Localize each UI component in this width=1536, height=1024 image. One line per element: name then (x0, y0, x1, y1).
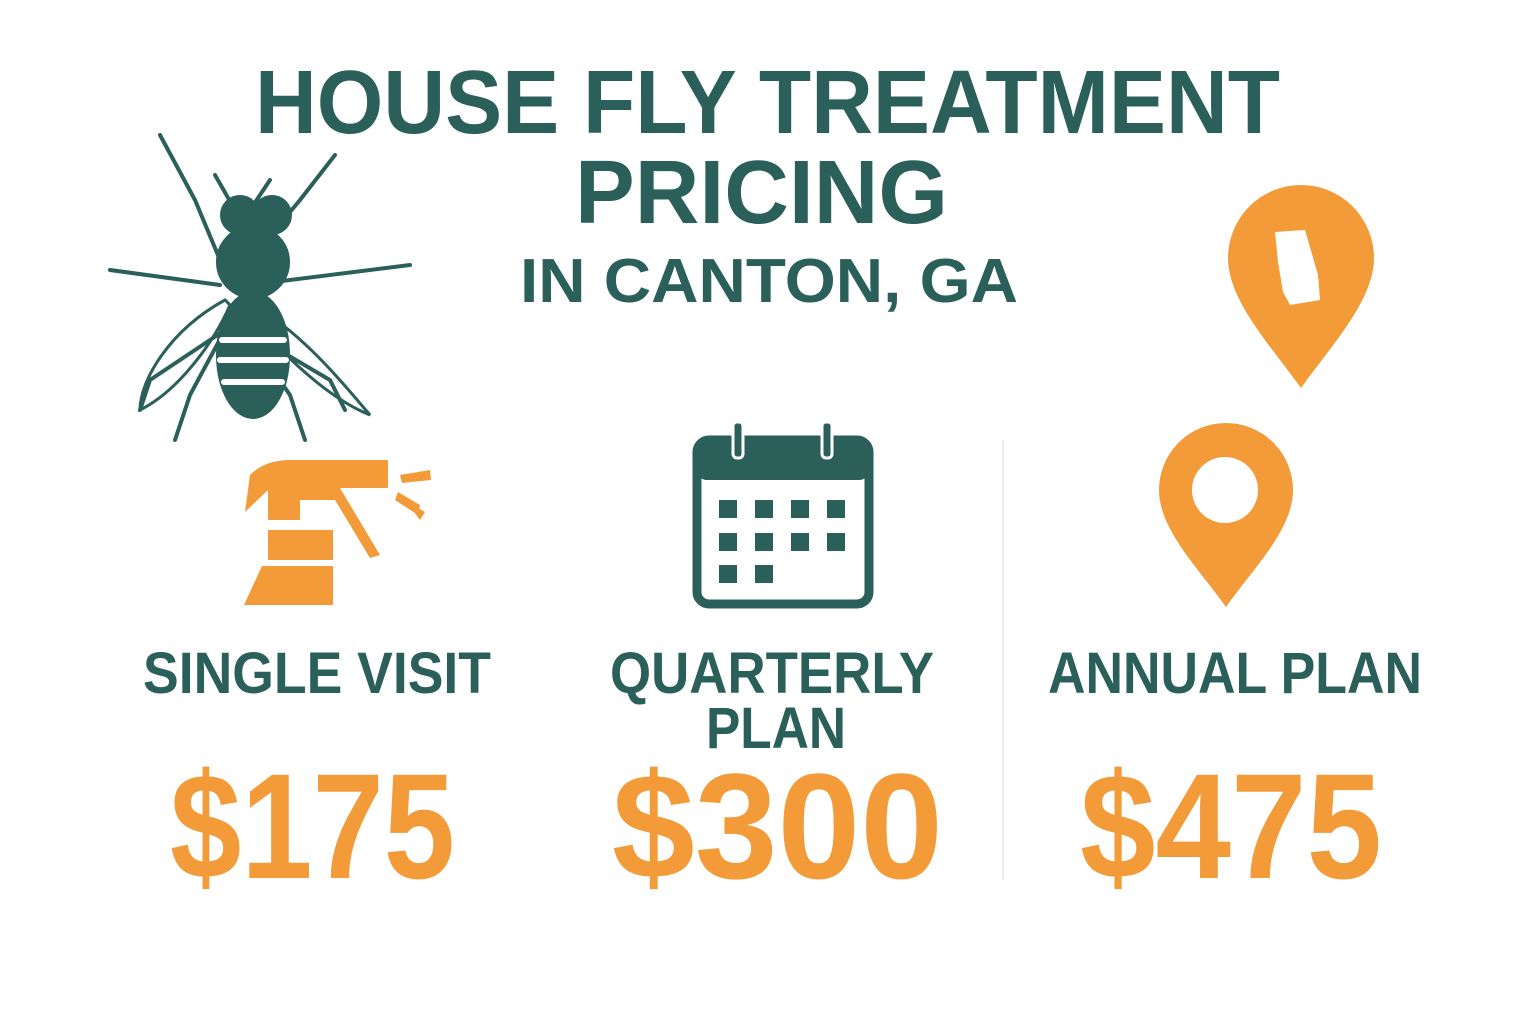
title: PRICING (575, 143, 948, 243)
icon: spray bottle (244, 460, 431, 605)
title: HOUSE FLY TREATMENT (255, 53, 1280, 153)
label: quarterly plan (610, 641, 934, 761)
icon: georgia map pin (1228, 185, 1374, 388)
icon: location pin (1159, 423, 1293, 607)
icon: house fly (110, 135, 410, 440)
icon: calendar (697, 422, 869, 604)
label: quarterly plan: QUARTERLY (610, 641, 934, 706)
price: quarterly: $300 (612, 742, 943, 910)
label: annual plan: ANNUAL PLAN (1048, 641, 1422, 706)
subtitle: IN CANTON, GA (520, 247, 1018, 316)
title (255, 53, 1280, 243)
label: quarterly plan: PLAN (706, 696, 846, 761)
label: single visit: SINGLE VISIT (143, 641, 491, 706)
price: single visit: $175 (170, 742, 455, 910)
price: annual: $475 (1080, 742, 1382, 910)
